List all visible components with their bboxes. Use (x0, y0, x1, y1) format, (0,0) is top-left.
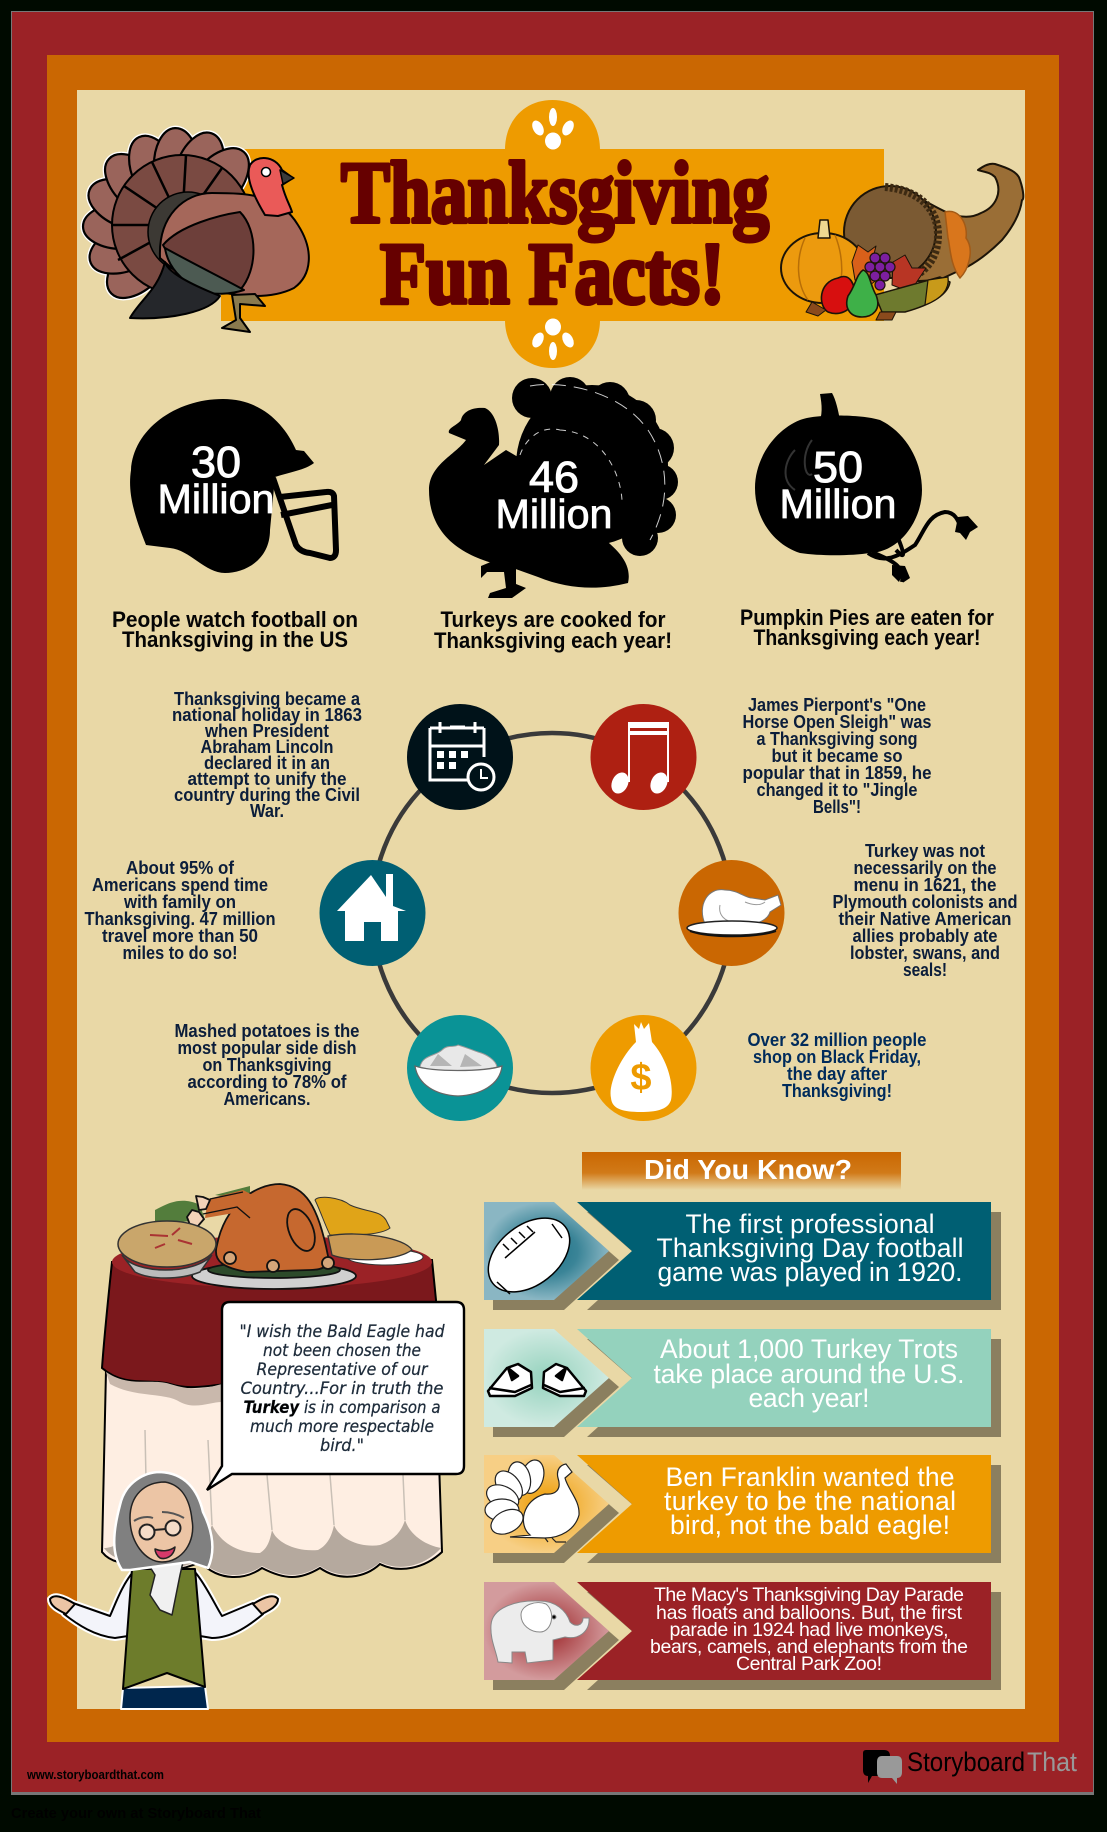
did you know heading: Did You Know? (644, 1154, 852, 1185)
icon: football helmet (130, 399, 336, 573)
fact: national holiday: when President (204, 720, 329, 741)
fact: national holiday: War. (250, 800, 284, 821)
fact row: football: The first professional (686, 1209, 934, 1239)
fact: family travel: miles to do so! (122, 942, 238, 963)
fact row: football: game was played in 1920. (658, 1257, 962, 1287)
cravat (147, 1562, 183, 1615)
stat caption (112, 607, 358, 652)
fact row: turkey trots (484, 1329, 1001, 1437)
glasses (140, 1520, 180, 1540)
roast turkey on platter (155, 1184, 356, 1289)
fact: national holiday (172, 688, 362, 821)
icon: music notes (590, 704, 696, 810)
mouth (155, 1547, 175, 1559)
fact row: ben franklin: turkey to be the national (664, 1486, 956, 1516)
fact row: macy's parade: parade in 1924 had live monkeys, (670, 1619, 948, 1641)
fact: family travel: travel more than 50 (102, 925, 258, 946)
fact row: football: Thanksgiving Day football (656, 1233, 964, 1263)
fact: national holiday: Thanksgiving became a (174, 688, 361, 709)
table drape (102, 1236, 436, 1406)
fact: black friday: Over 32 million people (748, 1029, 926, 1050)
fact: mashed potatoes: most popular side dish (178, 1037, 356, 1058)
fact: black friday (748, 1029, 926, 1101)
fact: 1621 menu: Turkey was not (865, 840, 985, 861)
speech bubble: Country...For in truth the (240, 1379, 444, 1398)
fact: national holiday: declared it in an (204, 752, 330, 773)
stat number: 46 (529, 453, 579, 502)
stat caption: People watch football on (112, 607, 358, 632)
fact: black friday: Thanksgiving! (782, 1080, 892, 1101)
did you know heading (582, 1152, 901, 1190)
stat unit: Million (158, 476, 274, 522)
speech bubble: "I wish the Bald Eagle had (240, 1322, 445, 1341)
table skirt (102, 1370, 442, 1577)
stat caption: Thanksgiving in the US (122, 627, 348, 652)
fact: family travel: with family on (123, 891, 236, 912)
fact: mashed potatoes: Mashed potatoes is the (174, 1020, 360, 1041)
icon: white turkey (483, 1457, 579, 1542)
stat caption: Thanksgiving each year! (434, 628, 672, 653)
fact: 1621 menu: seals! (903, 959, 947, 980)
fact row: macy's parade: bears, camels, and elephants from the (650, 1636, 968, 1658)
fact: 1621 menu: their Native American (838, 908, 1012, 929)
fact row: turkey trots: each year! (748, 1383, 870, 1413)
icon: calendar (407, 704, 513, 810)
footer logo: That (1027, 1747, 1077, 1777)
icon: football (474, 1203, 584, 1307)
fact: mashed potatoes (174, 1020, 360, 1109)
fact row: macy's parade: The Macy's Thanksgiving Day Parade (654, 1584, 964, 1606)
speech bubble: much more respectable (250, 1417, 434, 1436)
fact: family travel: About 95% of (126, 857, 235, 878)
icon: roast turkey on platter (678, 860, 784, 966)
bread on plate (328, 1234, 423, 1265)
fact row: macy's parade: Central Park Zoo! (736, 1653, 882, 1675)
face (130, 1482, 193, 1562)
fact row: turkey trots: About 1,000 Turkey Trots (660, 1334, 958, 1364)
fact row: ben franklin (483, 1455, 1001, 1563)
stat caption: Thanksgiving each year! (754, 625, 980, 650)
eyebrows (134, 1512, 184, 1521)
stat: 30 million football (112, 399, 358, 652)
fact: national holiday: national holiday in 1863 (172, 704, 362, 725)
hair (114, 1472, 212, 1570)
footer url: www.storyboardthat.com (26, 1767, 164, 1782)
fact row: macy's parade: has floats and balloons. But, the first (656, 1602, 963, 1624)
speech bubble: Representative of our (256, 1360, 429, 1379)
fact: national holiday: country during the Civil (174, 784, 360, 805)
speech bubble (207, 1302, 464, 1490)
fact row: ben franklin: Ben Franklin wanted the (666, 1462, 954, 1492)
fact: 1621 menu: necessarily on the (854, 857, 996, 878)
squash (315, 1197, 390, 1235)
stat unit: Million (780, 481, 896, 527)
fact: jingle bells: Bells"! (813, 796, 861, 817)
fact: mashed potatoes: according to 78% of (188, 1071, 347, 1092)
fact: 1621 menu: Plymouth colonists and (832, 891, 1018, 912)
fact: family travel: Americans spend time (92, 874, 268, 895)
title banner (221, 100, 884, 368)
fact: black friday: shop on Black Friday, (753, 1046, 921, 1067)
stat caption: Turkeys are cooked for (440, 607, 666, 632)
vest (123, 1569, 205, 1689)
fact row: macy's parade (484, 1582, 1001, 1690)
stat: 50 million pies (740, 393, 994, 650)
trousers (121, 1686, 208, 1709)
fact: jingle bells: but it became so (772, 745, 902, 766)
fact: jingle bells: Horse Open Sleigh" was (742, 711, 932, 732)
icon: turkey silhouette (429, 377, 678, 598)
stat caption (740, 605, 994, 650)
speech bubble: not been chosen the (263, 1341, 421, 1360)
icon: money bag (590, 1015, 696, 1121)
fact: family travel: Thanksgiving. 47 million (84, 908, 276, 929)
icon: cornucopia (781, 164, 1023, 320)
ring connecting fact icons (372, 733, 732, 1093)
character: Ben Franklin (50, 1472, 278, 1709)
fact row: turkey trots: take place around the U.S. (654, 1359, 964, 1389)
speech bubble: Turkey is in comparison a (244, 1398, 440, 1417)
credit line: Create your own at Storyboard That (11, 1805, 261, 1822)
icon: money bag: $ (630, 1057, 652, 1099)
stat: 46 million turkeys (429, 377, 678, 653)
fact: 1621 menu (832, 840, 1018, 980)
fact: national holiday: Abraham Lincoln (200, 736, 334, 757)
fact: jingle bells: a Thanksgiving song (756, 728, 918, 749)
title text (341, 145, 769, 323)
fact: 1621 menu: menu in 1621, the (854, 874, 996, 895)
fact: jingle bells: changed it to "Jingle (756, 779, 918, 800)
fact: family travel (84, 857, 276, 963)
cream content panel (77, 90, 1025, 1709)
icon: house (320, 860, 426, 966)
fact: national holiday: attempt to unify the (188, 768, 346, 789)
fact: jingle bells: James Pierpont's "One (748, 694, 926, 715)
icon: elephant (491, 1601, 589, 1663)
stat caption (434, 607, 672, 653)
arms (50, 1572, 278, 1638)
icon: pumpkin silhouette (755, 393, 978, 582)
fact row: football (474, 1202, 1001, 1310)
fact: jingle bells: popular that in 1859, he (742, 762, 932, 783)
footer logo: Storyboard (907, 1747, 1025, 1777)
fact: black friday: the day after (787, 1063, 887, 1084)
icon: mashed potatoes (407, 1015, 513, 1121)
fact: jingle bells (742, 694, 932, 817)
fact: mashed potatoes: Americans. (224, 1088, 310, 1109)
fact: 1621 menu: allies probably ate (852, 925, 998, 946)
title text: Fun Facts! (380, 226, 725, 323)
stat unit: Million (496, 491, 612, 537)
speech bubble: bird." (320, 1436, 364, 1455)
icon: sneakers (488, 1364, 586, 1396)
fact: mashed potatoes: on Thanksgiving (202, 1054, 332, 1075)
title text: Thanksgiving (341, 145, 769, 242)
stat number: 30 (191, 438, 241, 487)
fact: 1621 menu: lobster, swans, and (850, 942, 1000, 963)
pie (118, 1221, 216, 1278)
stat number: 50 (813, 443, 863, 492)
footer logo (863, 1747, 1077, 1784)
fact row: ben franklin: bird, not the bald eagle! (670, 1510, 950, 1540)
stat caption: Pumpkin Pies are eaten for (740, 605, 994, 630)
icon: colour turkey (81, 126, 309, 332)
illustration: table with food (102, 1184, 442, 1577)
